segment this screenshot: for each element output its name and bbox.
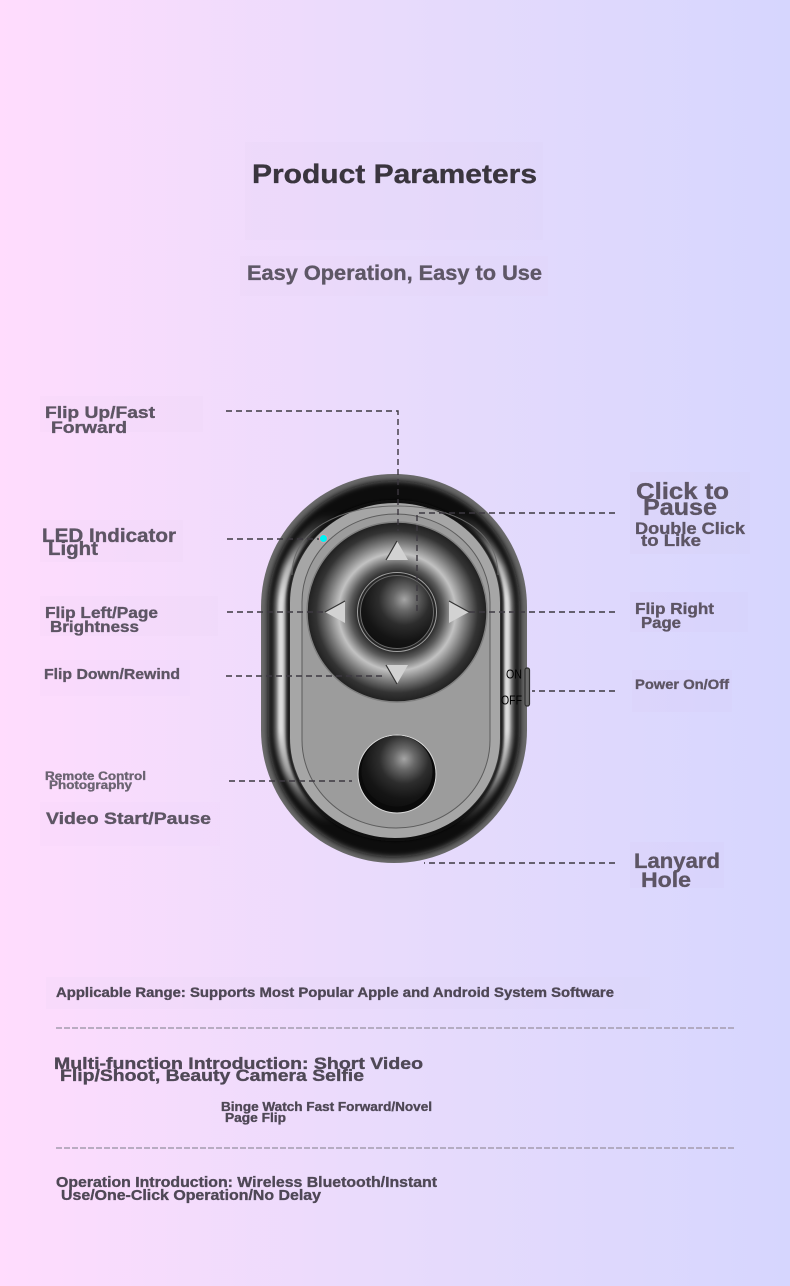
label: flip down	[40, 660, 190, 696]
label: flip left	[40, 596, 218, 636]
label: lanyard hole: Hole	[641, 869, 691, 892]
operation introduction text: Operation Introduction: Wireless Bluetooth/Instant	[56, 1174, 437, 1191]
label: power on/off	[632, 670, 732, 712]
subtitle: Easy Operation, Easy to Use	[247, 262, 542, 285]
center button	[358, 572, 436, 652]
multi-function introduction text	[54, 1054, 423, 1085]
operation introduction text	[56, 1174, 437, 1204]
label: click to pause	[630, 472, 750, 554]
power switch	[501, 666, 530, 708]
label: remote control photography: Remote Control	[45, 769, 146, 783]
label: click to pause: Double Click	[635, 519, 746, 538]
arrow up	[386, 541, 408, 560]
label: flip up: Flip Up/Fast	[45, 403, 155, 422]
multi-function introduction text: Flip/Shoot, Beauty Camera Selfie	[60, 1066, 364, 1085]
arrow left	[325, 601, 345, 623]
label: remote control photography: Photography	[49, 778, 132, 792]
label: flip up	[40, 396, 203, 437]
label: flip left: Brightness	[50, 619, 139, 636]
multi-function introduction text: Multi-function Introduction: Short Video	[54, 1054, 423, 1073]
label: remote control photography	[45, 769, 146, 792]
LED indicator	[319, 534, 328, 543]
label: click to pause: to Like	[641, 531, 701, 550]
title: Product Parameters	[252, 159, 537, 189]
title	[245, 142, 543, 240]
label: flip down: Flip Down/Rewind	[44, 666, 180, 683]
binge watch text: Page Flip	[225, 1110, 286, 1125]
binge watch text: Binge Watch Fast Forward/Novel	[221, 1099, 432, 1114]
arrow down	[386, 665, 408, 684]
power switch: OFF	[501, 692, 522, 708]
applicable range text	[46, 977, 650, 1009]
label: video start/pause	[40, 802, 220, 846]
subtitle	[240, 256, 548, 296]
direction pad ring	[307, 522, 487, 702]
label: click to pause: Click to	[636, 478, 729, 504]
power switch: ON	[506, 666, 522, 682]
label: power on/off: Power On/Off	[635, 676, 729, 692]
device: remote control	[261, 474, 530, 863]
label: LED indicator	[40, 520, 183, 562]
faceplate inset line	[302, 514, 490, 828]
faceplate upper arc line	[292, 506, 498, 575]
operation introduction text: Use/One-Click Operation/No Delay	[61, 1187, 322, 1204]
label: flip right: Page	[641, 615, 681, 632]
label: click to pause: Pause	[643, 494, 717, 520]
label: flip right: Flip Right	[635, 601, 715, 618]
label: flip left: Flip Left/Page	[45, 605, 158, 622]
label: LED indicator: Light	[48, 539, 99, 560]
applicable range text: Applicable Range: Supports Most Popular Apple and Android System Software	[56, 984, 614, 1000]
binge watch text	[221, 1099, 432, 1125]
arrow right	[449, 601, 469, 623]
label: lanyard hole: Lanyard	[634, 850, 720, 873]
label: flip right	[630, 592, 748, 632]
lower shutter button	[358, 734, 436, 814]
label: video start/pause: Video Start/Pause	[46, 809, 211, 828]
callout leader lines	[226, 411, 615, 863]
label: LED indicator: LED Indicator	[42, 526, 177, 547]
label: lanyard hole	[630, 842, 724, 892]
device body	[261, 474, 527, 863]
faceplate	[290, 503, 500, 838]
label: flip up: Forward	[51, 418, 127, 437]
